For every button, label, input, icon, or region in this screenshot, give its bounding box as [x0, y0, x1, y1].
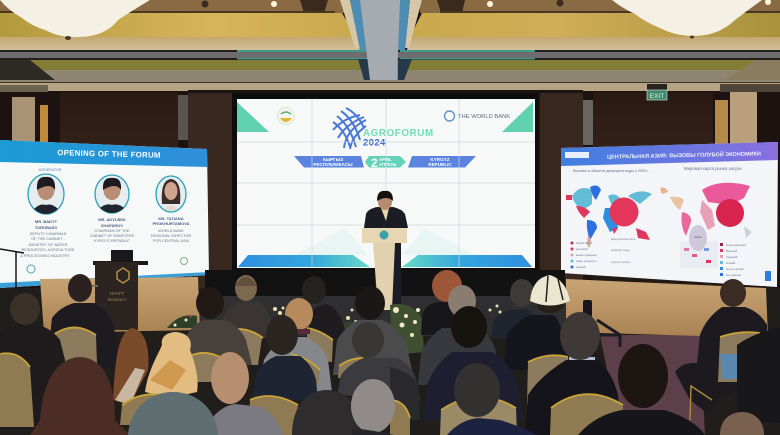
speaker captions: PROKHURTAMOVA	[153, 221, 190, 226]
chart legend: right: Нет данных	[726, 273, 742, 277]
chart legend: right: Низкий	[726, 261, 736, 265]
lectern: hotel branded: REGENCY	[108, 298, 127, 302]
droplet infographic	[680, 225, 718, 268]
chairs: second row	[52, 326, 333, 365]
speaker captions: MODERATOR	[38, 168, 62, 172]
chart legend: right: Высокий	[726, 249, 738, 253]
speaker captions: WORLD BANK	[158, 229, 184, 233]
podium	[362, 228, 407, 310]
speaker captions: ZHAPAROV	[101, 223, 123, 228]
LED tile seams	[237, 99, 535, 268]
bottom bar left	[238, 255, 370, 267]
legend notes	[611, 237, 636, 264]
audience: front row	[30, 344, 764, 435]
chandelier right	[612, 0, 762, 38]
logo text: 2024	[363, 138, 386, 148]
person: man in navy suit	[252, 315, 318, 400]
person: bald man	[207, 352, 283, 435]
speaker captions: MS. TATIANA	[158, 216, 184, 221]
chart: left world map	[566, 186, 652, 248]
person: man in kalpak hat	[503, 275, 570, 370]
speaker at podium	[364, 191, 408, 306]
banner: Kyrgyz Republic: REPUBLIC	[428, 162, 452, 167]
left ceiling coffer	[0, 0, 360, 50]
stage and floor	[0, 270, 780, 435]
person: man front right	[578, 344, 705, 435]
audience: second row	[0, 275, 767, 430]
speaker captions: FOR CENTRAL ASIA	[153, 239, 190, 243]
chart legend: right: Средний	[726, 255, 738, 259]
person: bald man bottom right	[720, 412, 764, 435]
speaker captions: MR. BAKYT	[35, 219, 58, 224]
icon: wheat grid logo	[333, 108, 366, 149]
person: dark foreground right	[737, 328, 780, 423]
speaker captions: OF THE CABINET -	[31, 237, 66, 241]
chart legend: left: более 80 %	[576, 241, 592, 245]
floor equipment	[583, 300, 620, 347]
speaker captions: TOROBAEV	[35, 225, 58, 230]
chart legend: right: Очень низкий	[726, 267, 744, 271]
person: blond woman	[258, 298, 332, 392]
speaker captions: RESOURCES, AGRICULTURE	[22, 248, 75, 252]
lectern: hotel branded: HYATT	[110, 291, 124, 296]
speaker captions: MINISTRY OF WATER	[29, 243, 68, 247]
banner: Kyrgyz Republic	[408, 156, 476, 168]
legend notes: дефицит воды	[611, 248, 630, 252]
person: right side man	[675, 279, 767, 413]
triangle top right	[502, 102, 533, 132]
exit sign: EXIT	[650, 93, 664, 100]
triangle top left	[237, 102, 269, 132]
icon: corner badge	[765, 271, 771, 281]
exit sign	[647, 84, 667, 100]
laptop	[720, 354, 747, 379]
chart legend: left: выше среднего	[576, 253, 598, 257]
person: man with grey hair right	[525, 312, 622, 435]
microphone stand	[0, 249, 24, 290]
person: far row man, right	[491, 279, 538, 338]
banner: Kyrgyz Respublikasy: КЫРГЫЗ	[323, 157, 343, 162]
chart legend: left: низкий	[576, 265, 586, 269]
speaker captions: KYRGYZ REPUBLIC	[94, 239, 130, 243]
person: man near flowers	[333, 286, 413, 375]
logo text: AGROFORUM	[363, 128, 434, 139]
speaker captions: CABINET OF MINISTERS	[90, 234, 135, 238]
world bank logo: THE WORLD BANK	[458, 114, 510, 120]
back wall	[0, 88, 780, 300]
bottom decorative wave	[295, 228, 475, 255]
portrait: moderator	[28, 174, 64, 214]
person: far left man in dark suit	[0, 293, 65, 430]
left screen logos	[27, 258, 188, 273]
person: man with glasses near lectern	[49, 274, 118, 367]
heading: OPENING OF THE FORUM	[57, 148, 161, 160]
speaker captions: REGIONAL DIRECTOR	[151, 234, 191, 238]
person: dark suit man center	[423, 306, 523, 420]
flower arrangements	[167, 304, 502, 355]
speaker captions: DEPUTY CHAIRMAN	[30, 232, 67, 236]
header band	[0, 140, 207, 167]
lectern: hotel branded	[93, 250, 148, 330]
person: woman with patterned scarf	[145, 332, 198, 398]
person: dark hair foreground	[292, 390, 362, 435]
chart legend: left: ниже среднего	[576, 259, 597, 263]
chart legend: left	[570, 241, 598, 269]
bottom bar right	[402, 255, 532, 267]
logo text	[363, 128, 434, 148]
banner: date: APRIL	[379, 157, 392, 162]
chairs: third row	[192, 332, 760, 405]
portrait: Zhaparov	[95, 175, 129, 213]
speaker captions	[20, 168, 191, 258]
person: man front center	[447, 363, 537, 435]
heading: ЦЕНТРАЛЬНАЯ АЗИЯ: ВЫЗОВЫ ГОЛУБОЙ ЭКОНОМИКИ	[607, 149, 761, 161]
person: grey hair foreground	[351, 379, 395, 435]
person: man in grey-brown suit	[183, 287, 252, 368]
map titles: Вызовы в области дефицита воды к 2050 г.	[573, 169, 649, 173]
speaker captions: & PROCESSING INDUSTRY	[20, 254, 70, 258]
audience: back rows	[49, 270, 538, 367]
ceiling	[0, 0, 780, 93]
chart legend: left: высокий	[576, 247, 588, 251]
person: grey haired man	[418, 285, 500, 385]
banner: date: АПРЕЛЬ	[379, 162, 397, 167]
chart legend: right	[720, 243, 746, 277]
banner: Kyrgyz Respublikasy	[294, 156, 364, 168]
person: man in grey suit	[337, 322, 420, 400]
ceiling spotlights	[202, 0, 771, 8]
right ceiling coffer	[407, 0, 780, 50]
audience: third row	[113, 306, 780, 435]
person: far row man, center left	[221, 275, 274, 338]
panel: main LED screen	[232, 93, 538, 272]
banner: date	[365, 156, 406, 170]
panel: left screen	[0, 140, 209, 288]
icon: left partner emblem	[278, 108, 294, 124]
person: blurred grey head	[128, 392, 218, 435]
map titles	[573, 166, 742, 173]
speaker captions: MR. AKYLBEK	[98, 217, 126, 222]
left draped table	[40, 277, 200, 333]
person: far row man, center	[302, 276, 347, 340]
legend notes: засуха и риски	[611, 260, 630, 264]
ceiling recess	[0, 50, 780, 93]
chair frame legs	[690, 385, 712, 420]
world bank logo	[444, 111, 510, 121]
panel: right screen	[561, 142, 778, 287]
right draped table	[566, 279, 768, 338]
speaker captions: CHAIRMAN OF THE	[94, 229, 130, 233]
map titles: Мировая карта рынка засухи	[684, 166, 742, 171]
person: long brown hair woman	[30, 357, 130, 435]
chart legend: right: Очень высокий	[726, 243, 746, 247]
header band	[561, 142, 778, 166]
central ceiling beam	[340, 0, 422, 80]
droplet infographic: Спрос	[694, 235, 703, 239]
banner: Kyrgyz Republic: KYRGYZ	[430, 157, 450, 162]
portrait: Prokhurtamova	[156, 176, 186, 212]
banner: Kyrgyz Respublikasy: РЕСПУБЛИКАСЫ	[313, 162, 353, 167]
person: left dark man partial	[390, 367, 420, 420]
person: far row redhead woman	[421, 270, 462, 335]
chart: right world map	[660, 183, 752, 238]
chairs: front row	[0, 353, 623, 435]
legend notes: Центральная Азия	[611, 237, 636, 241]
header logo	[565, 152, 589, 158]
chandelier left	[0, 0, 150, 40]
person: woman with long hair	[113, 328, 148, 405]
banner: date: 2	[371, 156, 378, 170]
